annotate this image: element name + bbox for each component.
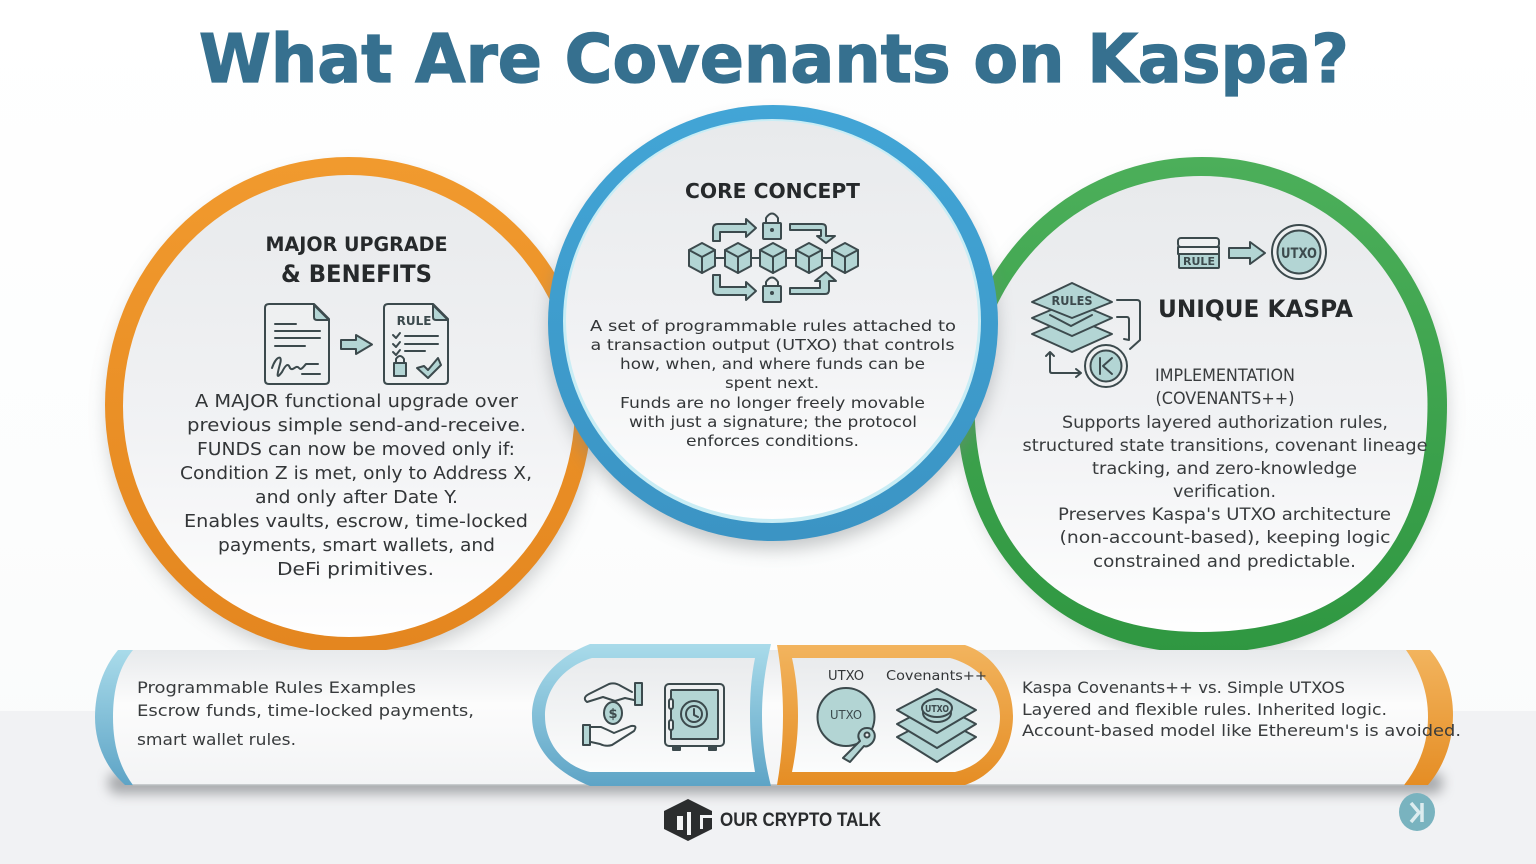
icon: UTXO with key	[818, 688, 875, 762]
text: unique kaspa body: Supports layered authorization rules,	[1062, 413, 1388, 432]
orange tab with UTXO and covenants icons	[777, 645, 1013, 785]
icon: layered covenant	[897, 689, 976, 762]
icon: kaspa badge	[1399, 793, 1435, 831]
text: core concept body: with just a signature; the protocol	[629, 413, 917, 431]
panel: core concept	[548, 105, 998, 549]
heading: core concept: CORE CONCEPT	[685, 179, 860, 203]
icon: layered rules: RULES	[1052, 294, 1092, 308]
heading: unique kaspa: UNIQUE KASPA	[1158, 295, 1353, 323]
text: programmable rules examples: Escrow funds, time-locked payments,	[137, 701, 474, 720]
icon: layered rules	[1032, 283, 1140, 387]
icon: UTXO with key: UTXO	[830, 708, 862, 722]
text: unique kaspa body: (COVENANTS++)	[1156, 389, 1294, 408]
text: programmable rules examples: Programmable Rules Examples	[137, 678, 416, 697]
icon: signed document to rule document: RULE	[397, 314, 431, 328]
heading: major upgrade	[266, 233, 448, 288]
text: core concept body: how, when, and where funds can be	[620, 355, 925, 373]
text: covenants vs UTXOs	[1022, 678, 1461, 740]
text: unique kaspa body: constrained and predictable.	[1093, 552, 1356, 571]
logo: our crypto talk	[664, 799, 881, 841]
icon: blockchain with locks	[689, 214, 858, 302]
text: major upgrade body: payments, smart wallets, and	[218, 536, 495, 556]
text: unique kaspa body	[1022, 366, 1428, 571]
left cap	[95, 650, 150, 785]
logo: our crypto talk: OUR CRYPTO TALK	[720, 810, 881, 831]
text: major upgrade body: and only after Date Y.	[255, 488, 458, 508]
text: unique kaspa body: IMPLEMENTATION	[1155, 366, 1295, 385]
text: core concept body: A set of programmable rules attached to	[590, 317, 956, 335]
icon: rule to UTXO: RULE	[1183, 255, 1215, 268]
text: unique kaspa body: verification.	[1173, 482, 1276, 501]
text: major upgrade body: DeFi primitives.	[277, 560, 434, 580]
blue tab with escrow icons	[532, 644, 771, 786]
panel: major upgrade and benefits	[105, 157, 593, 660]
text: unique kaspa body: tracking, and zero-knowledge	[1092, 459, 1357, 478]
text: covenants vs UTXOs: Kaspa Covenants++ vs. Simple UTXOS	[1022, 678, 1345, 697]
title: What Are Covenants on Kaspa?	[199, 20, 1349, 98]
text: unique kaspa body: Preserves Kaspa's UTXO architecture	[1058, 505, 1391, 524]
text: major upgrade body	[180, 392, 532, 580]
text: major upgrade body: A MAJOR functional upgrade over	[195, 392, 519, 412]
panel: bottom comparison bar	[95, 644, 1461, 794]
text: core concept body	[590, 317, 956, 450]
heading: major upgrade: & BENEFITS	[281, 260, 432, 288]
text: core concept body: a transaction output (UTXO) that controls	[590, 336, 954, 354]
text: core concept body: spent next.	[725, 374, 819, 392]
text: core concept body: enforces conditions.	[686, 432, 859, 450]
heading: major upgrade: MAJOR UPGRADE	[266, 233, 448, 256]
icon: rule to UTXO: UTXO	[1281, 246, 1317, 262]
icon: rule to UTXO	[1178, 225, 1326, 279]
icon: signed document to rule document	[265, 304, 448, 384]
text: major upgrade body: FUNDS can now be moved only if:	[197, 440, 515, 460]
text: unique kaspa body: structured state transitions, covenant lineage	[1022, 436, 1428, 455]
text: covenants vs UTXOs: Layered and flexible rules. Inherited logic.	[1022, 700, 1387, 719]
icon: layered covenant: UTXO	[925, 704, 949, 715]
text: core concept body: Funds are no longer freely movable	[620, 394, 925, 412]
icon: safe	[665, 684, 724, 751]
panel: unique kaspa	[957, 157, 1447, 660]
label: Covenants++: Covenants++	[886, 668, 987, 684]
text: major upgrade body: previous simple send-and-receive.	[187, 416, 526, 436]
text: major upgrade body: Enables vaults, escrow, time-locked	[184, 512, 528, 532]
icon: hands and coin: $	[608, 707, 618, 722]
right cap	[1404, 650, 1453, 785]
text: unique kaspa body: (non-account-based), keeping logic	[1060, 528, 1390, 547]
text: covenants vs UTXOs: Account-based model like Ethereum's is avoided.	[1022, 721, 1461, 740]
text: programmable rules examples	[137, 678, 474, 749]
text: major upgrade body: Condition Z is met, only to Address X,	[180, 464, 532, 484]
text: programmable rules examples: smart wallet rules.	[137, 730, 296, 749]
icon: hands and coin	[583, 683, 642, 746]
label: UTXO: UTXO	[828, 669, 864, 684]
